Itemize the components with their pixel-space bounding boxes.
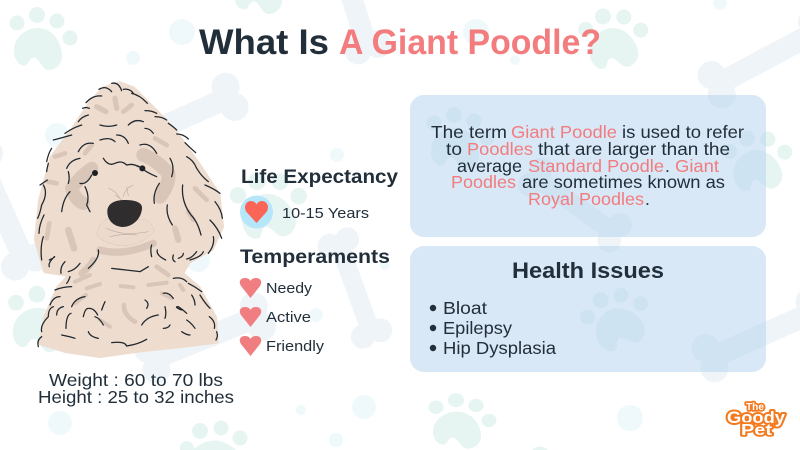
fur curls xyxy=(38,83,222,347)
temperament: needy: Needy xyxy=(266,280,313,297)
panel: definition text: Standard Poodle xyxy=(528,156,664,176)
panel: definition text: . xyxy=(645,189,650,209)
nose xyxy=(107,200,142,227)
health issues list: Hip Dysplasia xyxy=(443,338,556,358)
title xyxy=(199,23,601,62)
nose bridge lines xyxy=(107,185,148,237)
measurements xyxy=(38,370,234,407)
logo: The Goody Pet xyxy=(727,402,786,439)
life expectancy section xyxy=(240,166,398,228)
panel: definition text: Giant Poodle xyxy=(511,122,617,142)
life expectancy value: 10-15 Years xyxy=(282,205,369,222)
illustration: giant poodle xyxy=(36,83,222,356)
temperaments heading: Temperaments xyxy=(240,246,390,268)
panel: definition text: average xyxy=(457,156,522,176)
panel: definition background xyxy=(410,95,766,237)
panel: definition text: The term xyxy=(431,122,507,142)
health issues list: Bloat xyxy=(443,298,487,318)
fur shading xyxy=(47,98,207,327)
panel: definition text: are sometimes known as xyxy=(522,172,725,192)
logo: The Goody Pet: Pet xyxy=(741,422,772,439)
muzzle xyxy=(97,218,155,246)
title: A Giant Poodle? xyxy=(339,23,601,62)
panel: definition text: that are larger than the xyxy=(538,139,730,159)
icon: heart in blue circle xyxy=(240,196,273,228)
temperament: friendly xyxy=(240,336,325,356)
panel: definition text: is used to refer xyxy=(622,122,744,142)
panel: definition text: Giant xyxy=(675,156,719,176)
dog face xyxy=(90,164,155,243)
panel: definition text: to xyxy=(446,139,462,159)
panel: definition text: Poodles xyxy=(467,139,533,159)
logo: The Goody Pet: The xyxy=(746,402,764,413)
panel: definition text: . xyxy=(665,156,670,176)
health issues heading: Health Issues xyxy=(512,258,664,283)
health issues list xyxy=(430,298,556,358)
measurements: Weight : 60 to 70 lbs xyxy=(49,370,223,390)
temperament: friendly: Friendly xyxy=(266,338,325,355)
title: What Is xyxy=(199,23,329,62)
dog fur silhouette xyxy=(36,83,222,356)
panel: definition text: Royal Poodles xyxy=(528,189,644,209)
panel: health issues background xyxy=(410,246,766,372)
temperaments section xyxy=(240,246,390,356)
life expectancy heading: Life Expectancy xyxy=(241,166,398,188)
logo: The Goody Pet: Goody xyxy=(727,408,786,427)
temperament: needy xyxy=(240,278,313,298)
panel: health issues content xyxy=(430,258,664,358)
measurements: Height : 25 to 32 inches xyxy=(38,387,234,407)
temperament: active: Active xyxy=(266,309,311,326)
health issues list: Epilepsy xyxy=(443,318,512,338)
panel: definition text: Poodles xyxy=(451,172,516,192)
temperament: active xyxy=(240,307,311,327)
eyes xyxy=(92,165,145,176)
panel: definition text xyxy=(431,122,744,209)
